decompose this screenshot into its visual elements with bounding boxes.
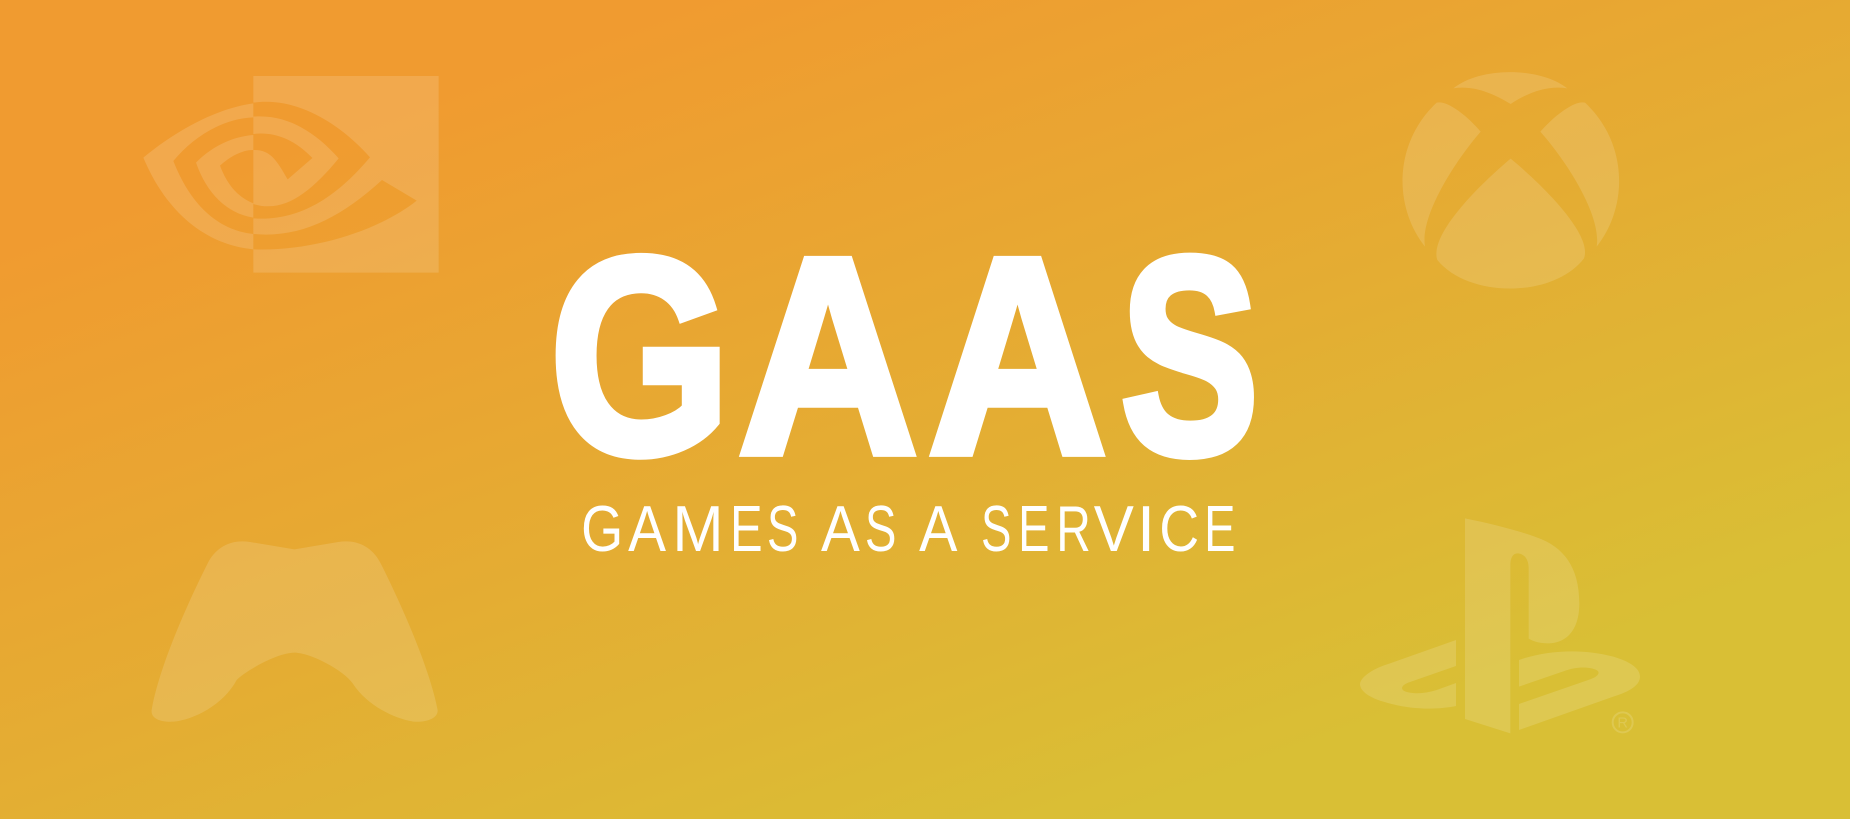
title: S bbox=[1120, 200, 1259, 513]
subtitle: S bbox=[767, 494, 798, 566]
subtitle: E bbox=[730, 493, 763, 566]
title: A bbox=[738, 200, 918, 513]
subtitle: A bbox=[821, 493, 860, 566]
icon: playstation logo: R bbox=[1617, 716, 1628, 732]
subtitle: E bbox=[1018, 493, 1049, 565]
subtitle: S bbox=[865, 494, 896, 566]
subtitle: C bbox=[1159, 493, 1199, 565]
icon: playstation logo bbox=[1360, 518, 1640, 733]
icon: xbox logo bbox=[1403, 72, 1619, 289]
subtitle: A bbox=[628, 493, 666, 565]
icon: nvidia logo bbox=[143, 76, 439, 273]
subtitle: S bbox=[981, 492, 1011, 565]
subtitle: A bbox=[919, 493, 958, 565]
icon: game controller bbox=[152, 541, 438, 722]
subtitle bbox=[581, 492, 1235, 566]
title: A bbox=[928, 201, 1107, 513]
subtitle: G bbox=[581, 492, 623, 565]
subtitle: V bbox=[1094, 493, 1134, 565]
subtitle: I bbox=[1137, 493, 1155, 565]
subtitle: M bbox=[672, 494, 724, 565]
subtitle: R bbox=[1056, 493, 1091, 566]
title bbox=[550, 199, 1259, 513]
subtitle: E bbox=[1204, 493, 1235, 565]
title: G bbox=[550, 199, 730, 513]
